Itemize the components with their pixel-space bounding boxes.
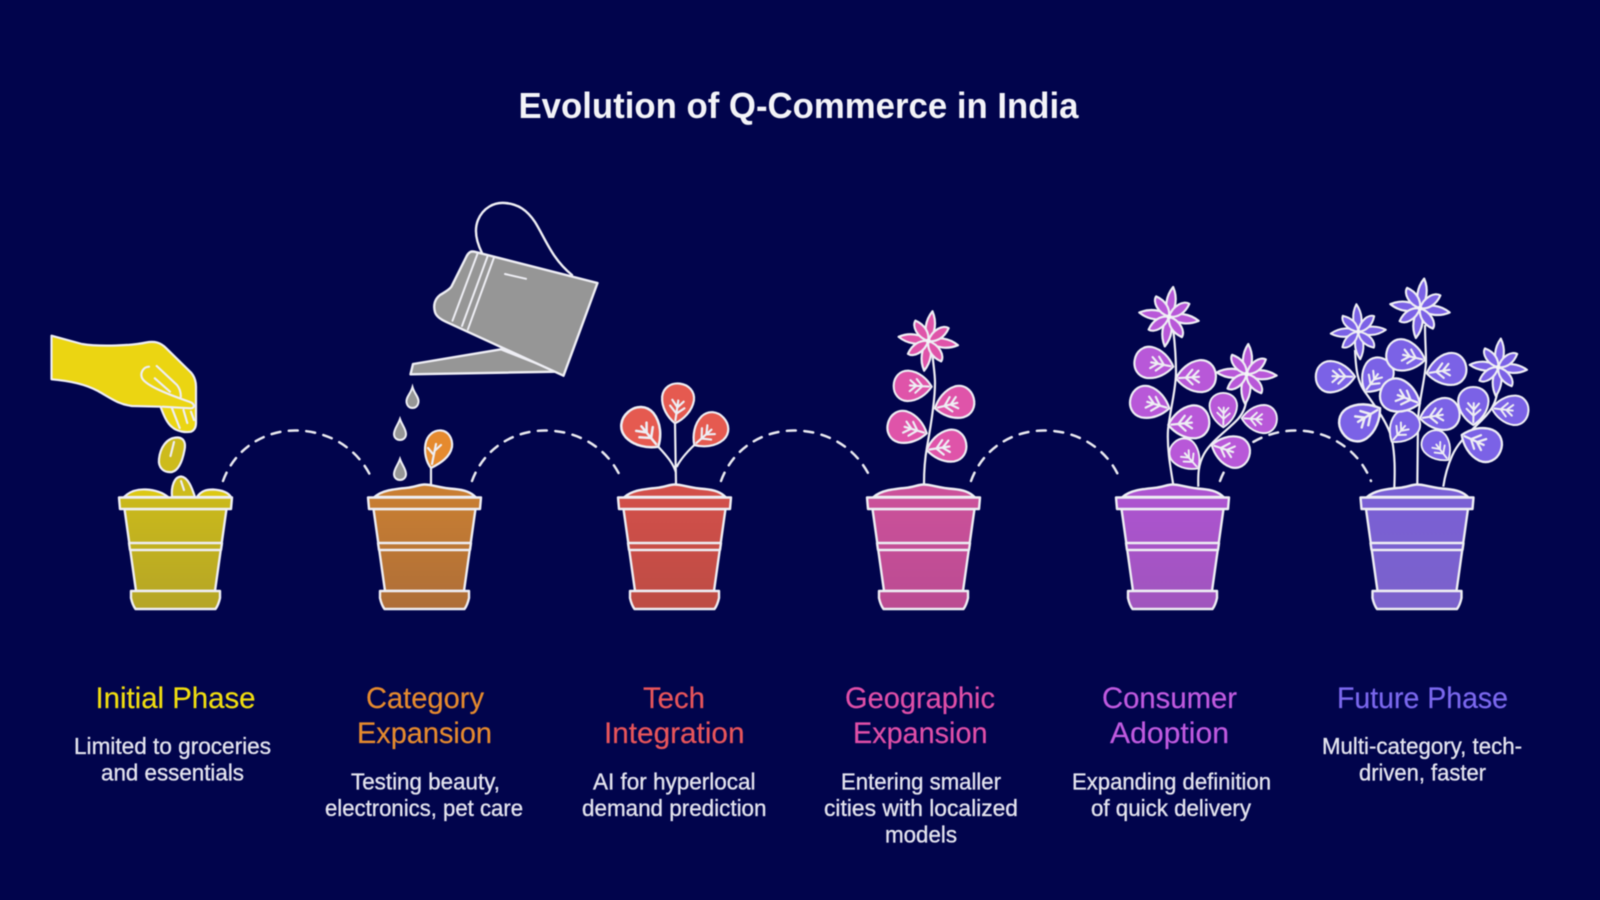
icon: flowering plant <box>884 307 978 484</box>
title: Evolution of Q-Commerce in India <box>518 85 1079 126</box>
arrow: tech to geographic <box>721 430 871 481</box>
arrow: geographic to consumer <box>971 430 1120 481</box>
icon: pot with soil <box>368 484 481 609</box>
can handle <box>476 203 572 275</box>
description <box>325 769 523 821</box>
icon: soil mounds <box>124 489 231 497</box>
icon: pot with soil <box>867 484 980 609</box>
icon: three-leaf plant <box>614 382 734 484</box>
icon: hand dropping seed <box>52 336 196 432</box>
heading: Future Phase <box>1337 682 1508 715</box>
description: demand prediction <box>582 795 766 821</box>
description: models <box>885 822 957 848</box>
description: electronics, pet care <box>325 795 523 821</box>
description: Expanding definition <box>1072 769 1271 795</box>
step 6: future phase <box>1316 274 1530 786</box>
description: Multi-category, tech- <box>1322 733 1522 759</box>
heading: Expansion <box>357 717 492 750</box>
icon: pot with soil <box>1116 484 1229 609</box>
step 4: geographic expansion <box>824 307 1018 848</box>
description <box>1072 769 1271 821</box>
heading: Geographic <box>845 682 995 715</box>
can body <box>434 251 598 376</box>
description <box>824 769 1018 848</box>
heading: Adoption <box>1110 717 1229 750</box>
heading: Expansion <box>853 717 988 750</box>
icon: three-stem flowering plant <box>1316 274 1530 488</box>
heading <box>845 682 995 750</box>
description <box>1322 733 1522 786</box>
heading <box>604 682 744 750</box>
step 3: tech integration <box>582 382 766 821</box>
description: Entering smaller <box>841 769 1001 795</box>
icon: two-stem flowering plant <box>1127 283 1278 487</box>
description: AI for hyperlocal <box>593 769 756 795</box>
icon: falling seed <box>159 437 185 472</box>
arrow: initial to category <box>223 430 372 481</box>
description: and essentials <box>101 760 244 786</box>
arrow: category to tech <box>472 430 622 481</box>
description: Limited to groceries <box>74 733 271 759</box>
description: cities with localized <box>824 795 1018 821</box>
step 1: initial phase <box>52 336 271 786</box>
description <box>582 769 766 821</box>
heading: Initial Phase <box>96 682 256 715</box>
description: driven, faster <box>1359 760 1486 786</box>
step 2: category expansion <box>325 430 523 821</box>
icon: pot with soil <box>618 484 731 609</box>
can spout <box>410 349 558 374</box>
icon: pot with soil <box>1360 484 1474 609</box>
dashed connector arcs <box>223 430 1371 481</box>
heading <box>357 682 492 750</box>
heading: Category <box>366 682 484 715</box>
heading: Consumer <box>1102 682 1237 715</box>
description <box>74 733 271 786</box>
heading <box>1102 682 1237 750</box>
heading: Tech <box>643 682 705 715</box>
can stripes <box>452 254 526 329</box>
icon: sprout <box>425 430 452 486</box>
icon: watering can <box>410 203 598 376</box>
heading: Integration <box>604 717 744 750</box>
arrow: consumer to future <box>1220 430 1371 481</box>
icon: water drops <box>394 387 419 480</box>
step 5: consumer adoption <box>1072 283 1278 821</box>
icon: pot <box>119 498 232 609</box>
icon: seed in soil <box>172 476 195 497</box>
description: of quick delivery <box>1091 795 1251 821</box>
description: Testing beauty, <box>351 769 500 795</box>
